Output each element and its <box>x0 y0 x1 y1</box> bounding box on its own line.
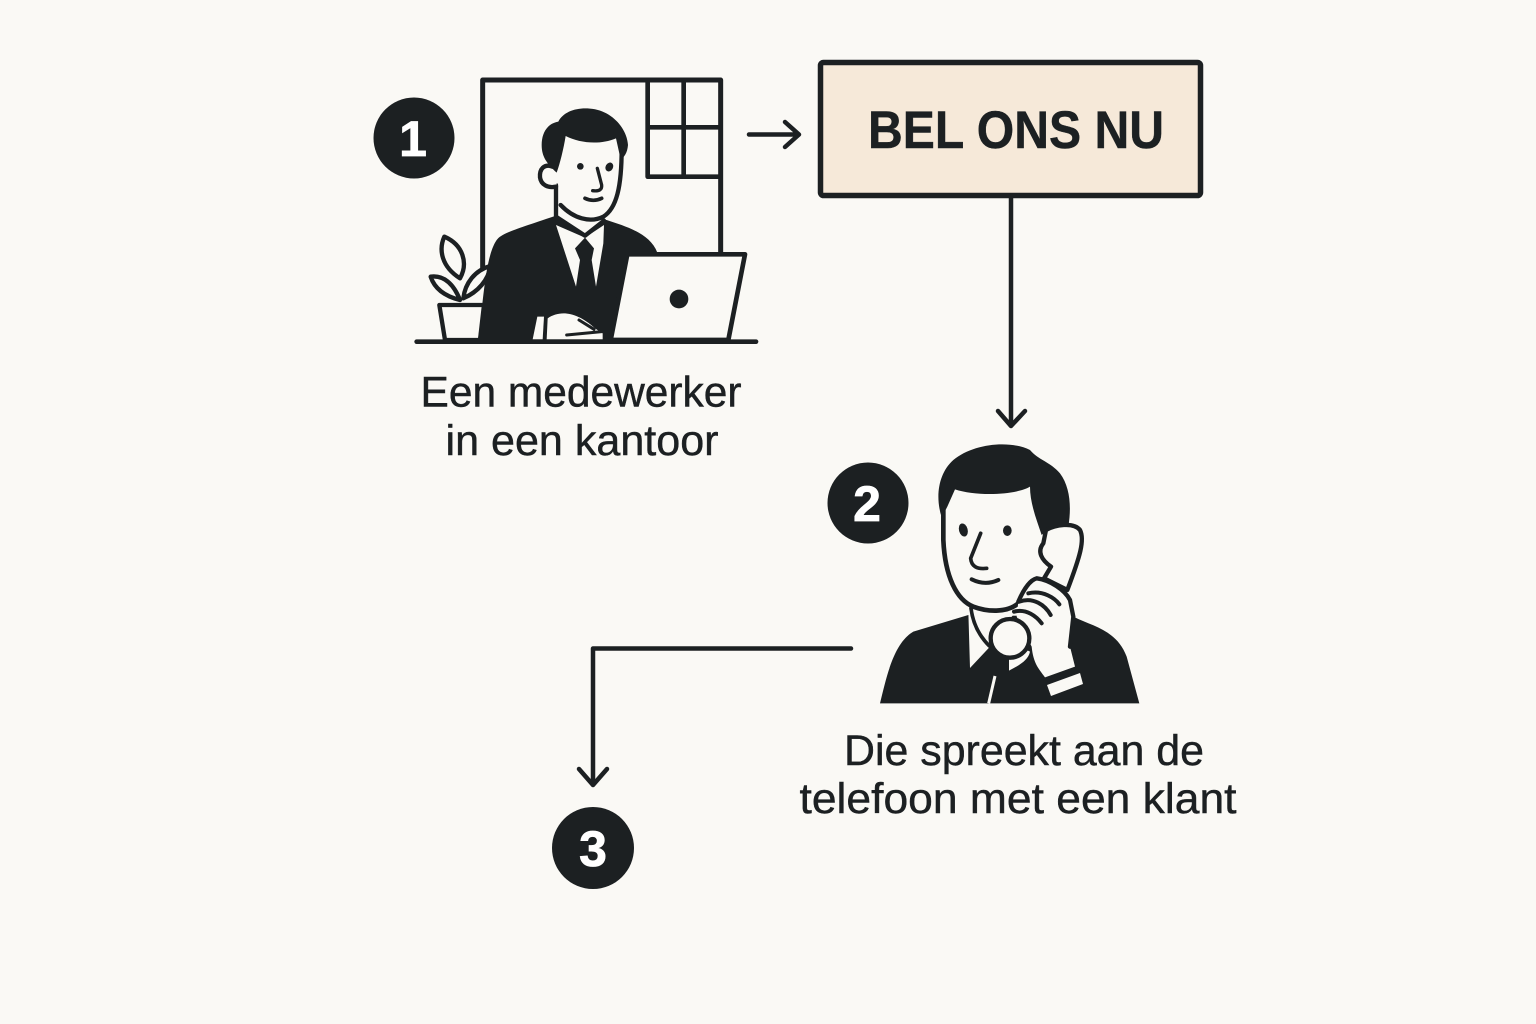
man torso <box>880 615 1139 703</box>
head <box>540 108 628 236</box>
step 1 badge <box>374 98 454 178</box>
arrow: button to step 2 <box>998 196 1025 426</box>
button: BEL ONS NU: BEL ONS NU <box>868 101 1164 160</box>
telephone handset <box>1040 525 1082 590</box>
illustration: employee on the phone <box>880 444 1139 703</box>
caption 2 <box>800 727 1237 823</box>
head <box>938 444 1070 646</box>
tie edge <box>989 676 995 703</box>
illustration: employee in office <box>417 80 756 342</box>
caption 2: Die spreekt aan de <box>844 727 1204 775</box>
step 2 badge: 2 <box>853 476 881 532</box>
laptop <box>611 254 745 340</box>
caption 1: Een medewerker <box>420 368 742 416</box>
shirt and tie <box>556 225 604 287</box>
caption 1: in een kantoor <box>446 417 718 465</box>
collar and neck <box>968 603 1030 671</box>
step 3 badge: 3 <box>579 821 607 877</box>
office window <box>648 80 721 177</box>
arrow: office to button <box>749 122 799 147</box>
button: BEL ONS NU <box>820 62 1200 196</box>
hand and arm <box>1014 578 1083 696</box>
hand and cuff <box>533 313 603 339</box>
office wall frame <box>483 80 721 270</box>
handset mouthpiece <box>991 619 1029 658</box>
desk <box>417 335 756 349</box>
step 1 badge: 1 <box>399 111 427 167</box>
man torso <box>478 216 657 340</box>
caption 1 <box>420 368 742 465</box>
caption 2: telefoon met een klant <box>800 775 1237 823</box>
arrow: step 2 to step 3 <box>579 648 851 785</box>
plant <box>431 237 491 340</box>
step 3 badge <box>552 807 634 889</box>
step 2 badge <box>828 462 908 544</box>
